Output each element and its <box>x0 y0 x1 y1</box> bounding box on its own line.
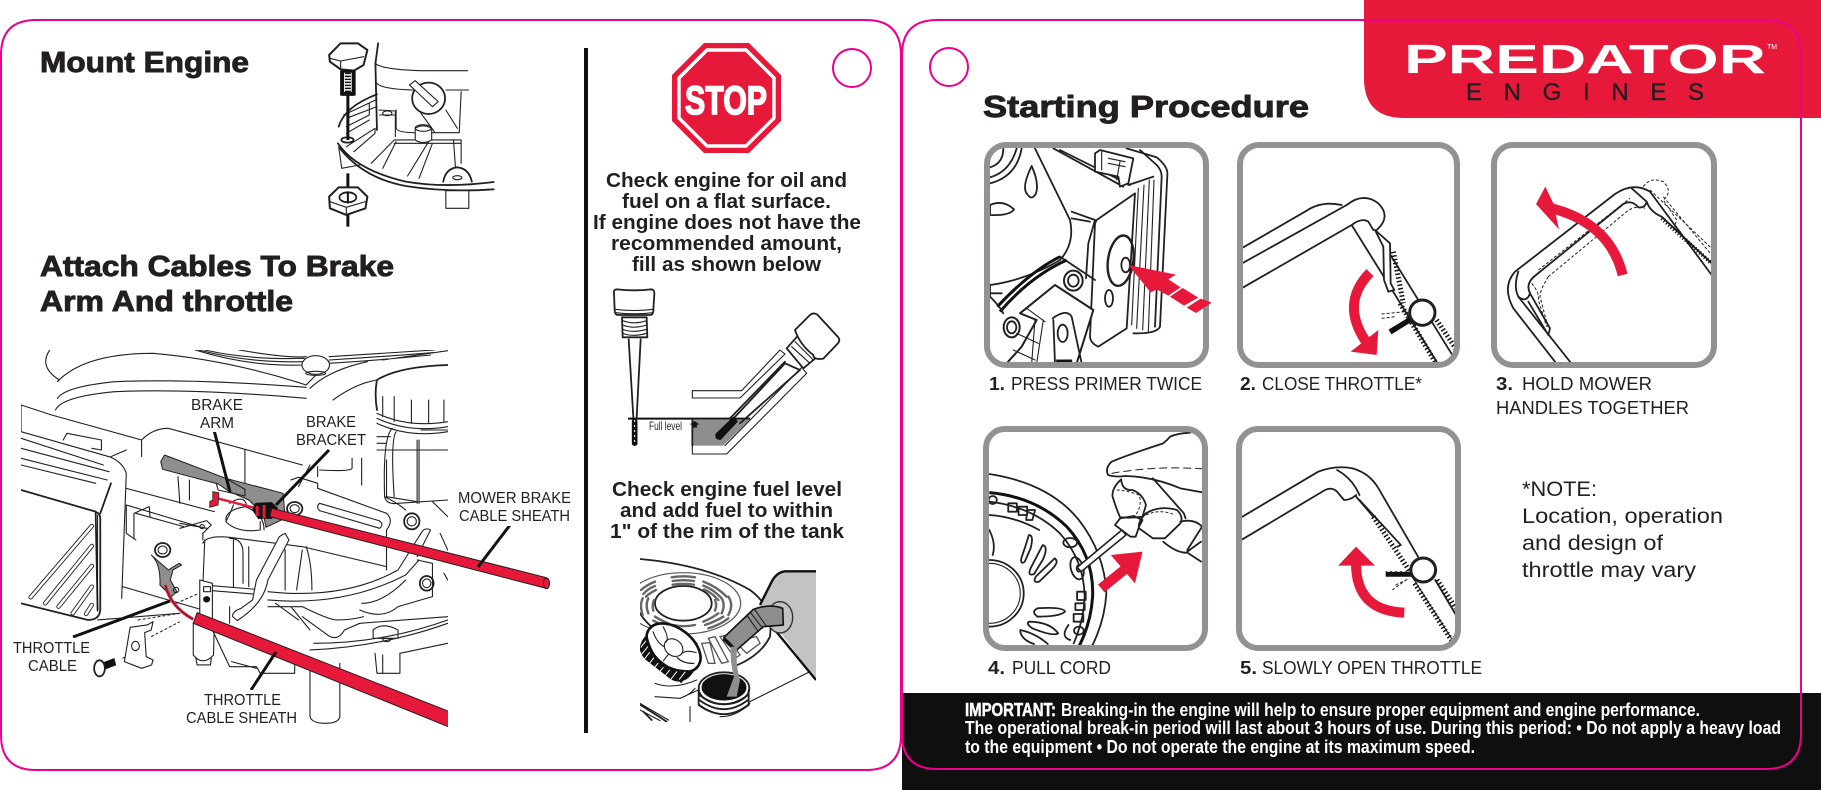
step 3 panel: hold mower handles: HOLD MOWER <box>1522 374 1652 394</box>
step 3 panel: hold mower handles: HANDLES TOGETHER <box>1496 398 1689 418</box>
illustration: handle closing throttle <box>1243 198 1457 362</box>
heading: Attach Cables To Brake Arm And throttle <box>40 251 394 318</box>
icon: stop sign <box>672 43 781 153</box>
leader: throttle cable <box>73 601 170 637</box>
red brake cable sheath <box>270 508 550 589</box>
label: full level: Full level <box>649 419 682 433</box>
label: brake arm: BRAKE <box>191 397 243 414</box>
illustration: oil dipstick and full level <box>614 289 839 454</box>
arrow: open throttle <box>1356 564 1404 613</box>
text: check engine oil: recommended amount, <box>611 233 842 255</box>
fuel stream <box>727 647 740 697</box>
text: check fuel level: and add fuel to within <box>620 500 833 522</box>
step frame <box>987 145 1206 365</box>
angled dipstick <box>730 362 800 423</box>
step frame <box>1494 145 1714 365</box>
punch hole left <box>833 49 871 87</box>
label: throttle cable sheath: THROTTLE <box>204 692 281 709</box>
text: check engine oil: fill as shown below <box>632 254 821 276</box>
left handle plate <box>21 490 100 620</box>
label: step 4: 4. <box>988 658 1005 678</box>
step 5 panel: open throttle <box>1239 429 1482 678</box>
arrow: pull cord <box>1101 568 1126 588</box>
label backgrounds <box>10 396 575 728</box>
step frame <box>1240 145 1457 365</box>
text: check engine oil: If engine does not have the <box>593 212 861 234</box>
panel border: right <box>902 20 1801 769</box>
leader: brake arm <box>214 430 230 492</box>
throttle cable clip on plate <box>151 555 182 597</box>
step 1 panel: press primer: PRESS PRIMER TWICE <box>1011 374 1202 394</box>
cable callout labels and leader lines: ARM <box>200 415 234 432</box>
label: step 2: 2. <box>1240 374 1256 394</box>
cable callout labels and leader lines: BRACKET <box>296 432 366 449</box>
arrow: press primer <box>1128 265 1212 313</box>
important notice <box>965 700 1781 757</box>
note: throttle may vary: *NOTE: <box>1522 478 1597 501</box>
oil cap <box>376 365 448 410</box>
note: throttle may vary: Location, operation <box>1522 505 1723 528</box>
full level arrow <box>690 421 699 427</box>
label: step 3: 3. <box>1496 374 1513 394</box>
hand <box>1106 432 1208 563</box>
text: check fuel level: Check engine fuel level <box>612 479 842 501</box>
step 2 panel: close throttle: CLOSE THROTTLE* <box>1262 374 1422 394</box>
label: throttle cable: THROTTLE <box>13 640 90 657</box>
icon: stop sign: STOP <box>685 79 767 123</box>
logo subtitle ENGINES: ENGINES <box>1466 79 1704 106</box>
note: throttle may vary: throttle may vary <box>1522 559 1697 582</box>
label: mower brake cable sheath: MOWER BRAKE <box>458 490 571 507</box>
cable callout labels and leader lines: CABLE SHEATH <box>459 508 570 525</box>
arrow: close throttle <box>1354 273 1370 342</box>
engine base <box>268 603 448 673</box>
heading: Attach Cables To Brake Arm And throttle: Arm And throttle <box>40 286 293 318</box>
heading: Attach Cables To Brake Arm And throttle: Attach Cables To Brake <box>40 251 394 283</box>
illustration: air filter and primer <box>990 148 1167 363</box>
illustration: handles squeezed <box>1508 180 1712 362</box>
cable callout labels and leader lines: CABLE <box>28 658 77 675</box>
tube with oil <box>692 419 750 446</box>
pull cord <box>1077 530 1126 572</box>
deck rail <box>21 405 302 598</box>
fuel cap <box>640 622 702 684</box>
fuel can <box>760 571 816 680</box>
throttle bracket <box>233 533 289 621</box>
red logo tab <box>1364 0 1821 118</box>
heading: Starting Procedure: Starting Procedure <box>983 89 1309 124</box>
divider bar <box>584 48 588 733</box>
filler neck <box>699 672 749 704</box>
brake arm <box>161 455 285 527</box>
label: brake bracket: BRAKE <box>306 414 356 431</box>
throttle clip and screw <box>124 622 153 668</box>
text: check fuel level <box>610 479 845 543</box>
right bracket <box>289 460 448 570</box>
illustration: mower deck with brake and throttle cables <box>21 350 450 727</box>
text: check engine oil <box>593 170 861 276</box>
punch hole right <box>930 48 968 86</box>
note: throttle may vary <box>1522 478 1723 582</box>
step frame <box>1239 429 1458 648</box>
step 5 panel: open throttle: SLOWLY OPEN THROTTLE <box>1262 658 1482 678</box>
illustration: mounting bolt and engine base <box>329 43 494 227</box>
leader: mower brake cable sheath <box>478 525 510 567</box>
step 3 panel: hold mower handles <box>1494 145 1714 418</box>
step 4 panel: pull cord: PULL CORD <box>1012 658 1111 678</box>
cable callout labels and leader lines <box>10 396 575 728</box>
fuel tank <box>203 507 387 590</box>
step frame <box>986 429 1205 648</box>
important notice: IMPORTANT: <box>965 700 1056 720</box>
text: check engine oil: Check engine for oil and <box>606 170 847 192</box>
step 1 panel: press primer <box>987 145 1212 394</box>
engine shroud and belts <box>46 350 448 410</box>
throttle thin cable <box>165 585 193 619</box>
important notice: to the equipment • Do not operate the engine at its maximum speed. <box>965 737 1475 757</box>
label: step 1: 1. <box>989 374 1005 394</box>
leader: brake bracket <box>276 450 329 505</box>
arrow: hold handles <box>1552 208 1623 275</box>
note: throttle may vary: and design of <box>1522 532 1663 555</box>
illustration: recoil starter and hand <box>989 432 1202 645</box>
step 4 panel: pull cord <box>983 426 1208 674</box>
black footer band <box>902 693 1821 790</box>
illustration: handle opening throttle <box>1242 467 1456 642</box>
heading: Mount Engine: Mount Engine <box>40 47 249 79</box>
label: step 5: 5. <box>1240 658 1257 678</box>
logo wordmark PREDATOR: PREDATOR <box>1404 36 1766 82</box>
panel border: left <box>1 20 901 770</box>
illustration: filling fuel tank <box>626 559 816 722</box>
leader: throttle cable sheath <box>251 652 276 690</box>
red throttle cable sheath <box>193 613 450 727</box>
important notice: Breaking-in the engine will help to ensure proper equipment and engine performance. <box>1061 700 1700 720</box>
cable callout labels and leader lines: CABLE SHEATH <box>186 710 297 727</box>
step 2 panel: close throttle <box>1240 145 1457 394</box>
brake cable thin red <box>218 498 254 509</box>
crossing strap <box>268 529 432 614</box>
trademark mark: TM <box>1767 44 1777 51</box>
straight dipstick <box>614 289 654 315</box>
text: check engine oil: fuel on a flat surface. <box>622 191 831 213</box>
text: check fuel level: 1" of the rim of the tank <box>610 521 845 543</box>
